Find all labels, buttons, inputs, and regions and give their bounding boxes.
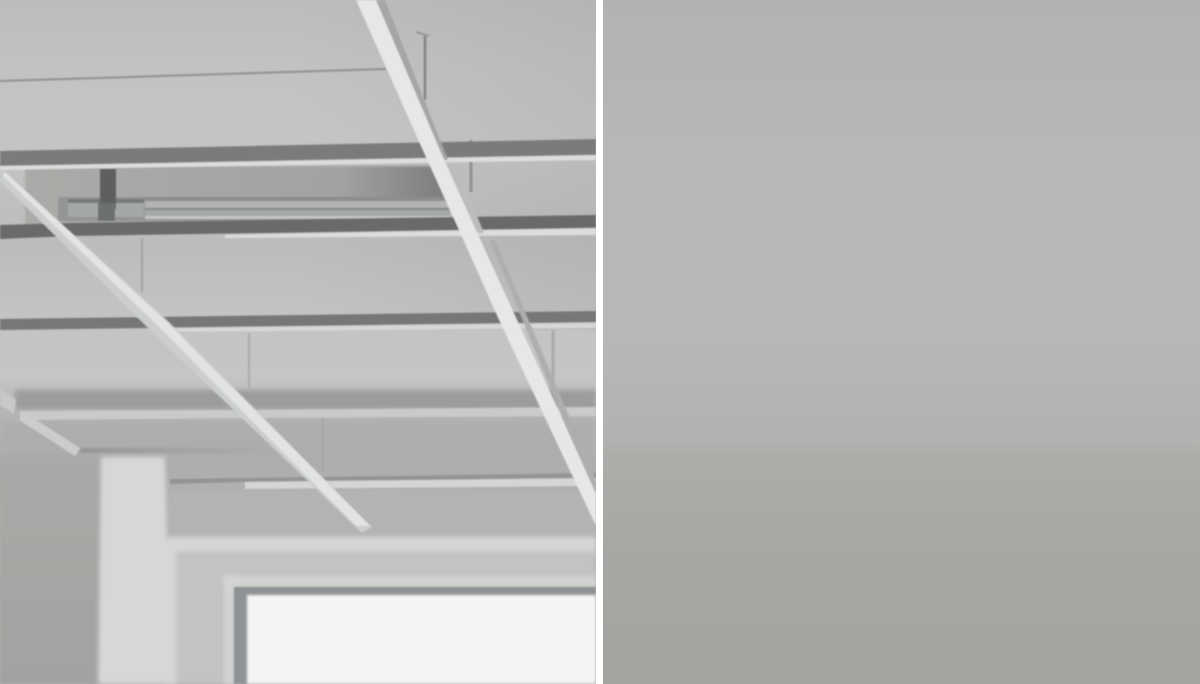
ceiling wall junction bbox=[603, 447, 1200, 452]
cross beam 4 bbox=[20, 407, 596, 420]
pillar bbox=[98, 457, 176, 684]
back wall bbox=[168, 537, 596, 684]
window bbox=[234, 587, 596, 684]
cross beam 2 bbox=[0, 215, 596, 239]
divider bbox=[596, 0, 603, 684]
cross tee beams bbox=[0, 139, 596, 489]
panel: exposed grid ceiling bbox=[0, 0, 600, 684]
wall bbox=[603, 450, 1200, 684]
thin hanger wires bbox=[0, 32, 553, 470]
smooth ceiling bbox=[603, 0, 1200, 450]
cross beam 1 bbox=[0, 139, 596, 166]
ceiling background bbox=[0, 0, 596, 684]
light fixture bbox=[58, 169, 450, 221]
recess shading behind the light fixture bbox=[25, 166, 445, 226]
panel: smooth stretch ceiling bbox=[603, 0, 1200, 684]
lower left beam stubs bbox=[0, 389, 16, 414]
lower left wall bbox=[0, 479, 98, 684]
ceiling shading toward the right bbox=[568, 45, 596, 330]
cross beam 5 bbox=[170, 473, 596, 484]
cross beam 3 bbox=[0, 311, 596, 330]
main diagonal runner left bbox=[0, 170, 372, 533]
main diagonal runner right bbox=[356, 0, 600, 526]
ceiling edge shadow bbox=[80, 448, 206, 454]
lower ceiling shadow band bbox=[10, 388, 596, 432]
